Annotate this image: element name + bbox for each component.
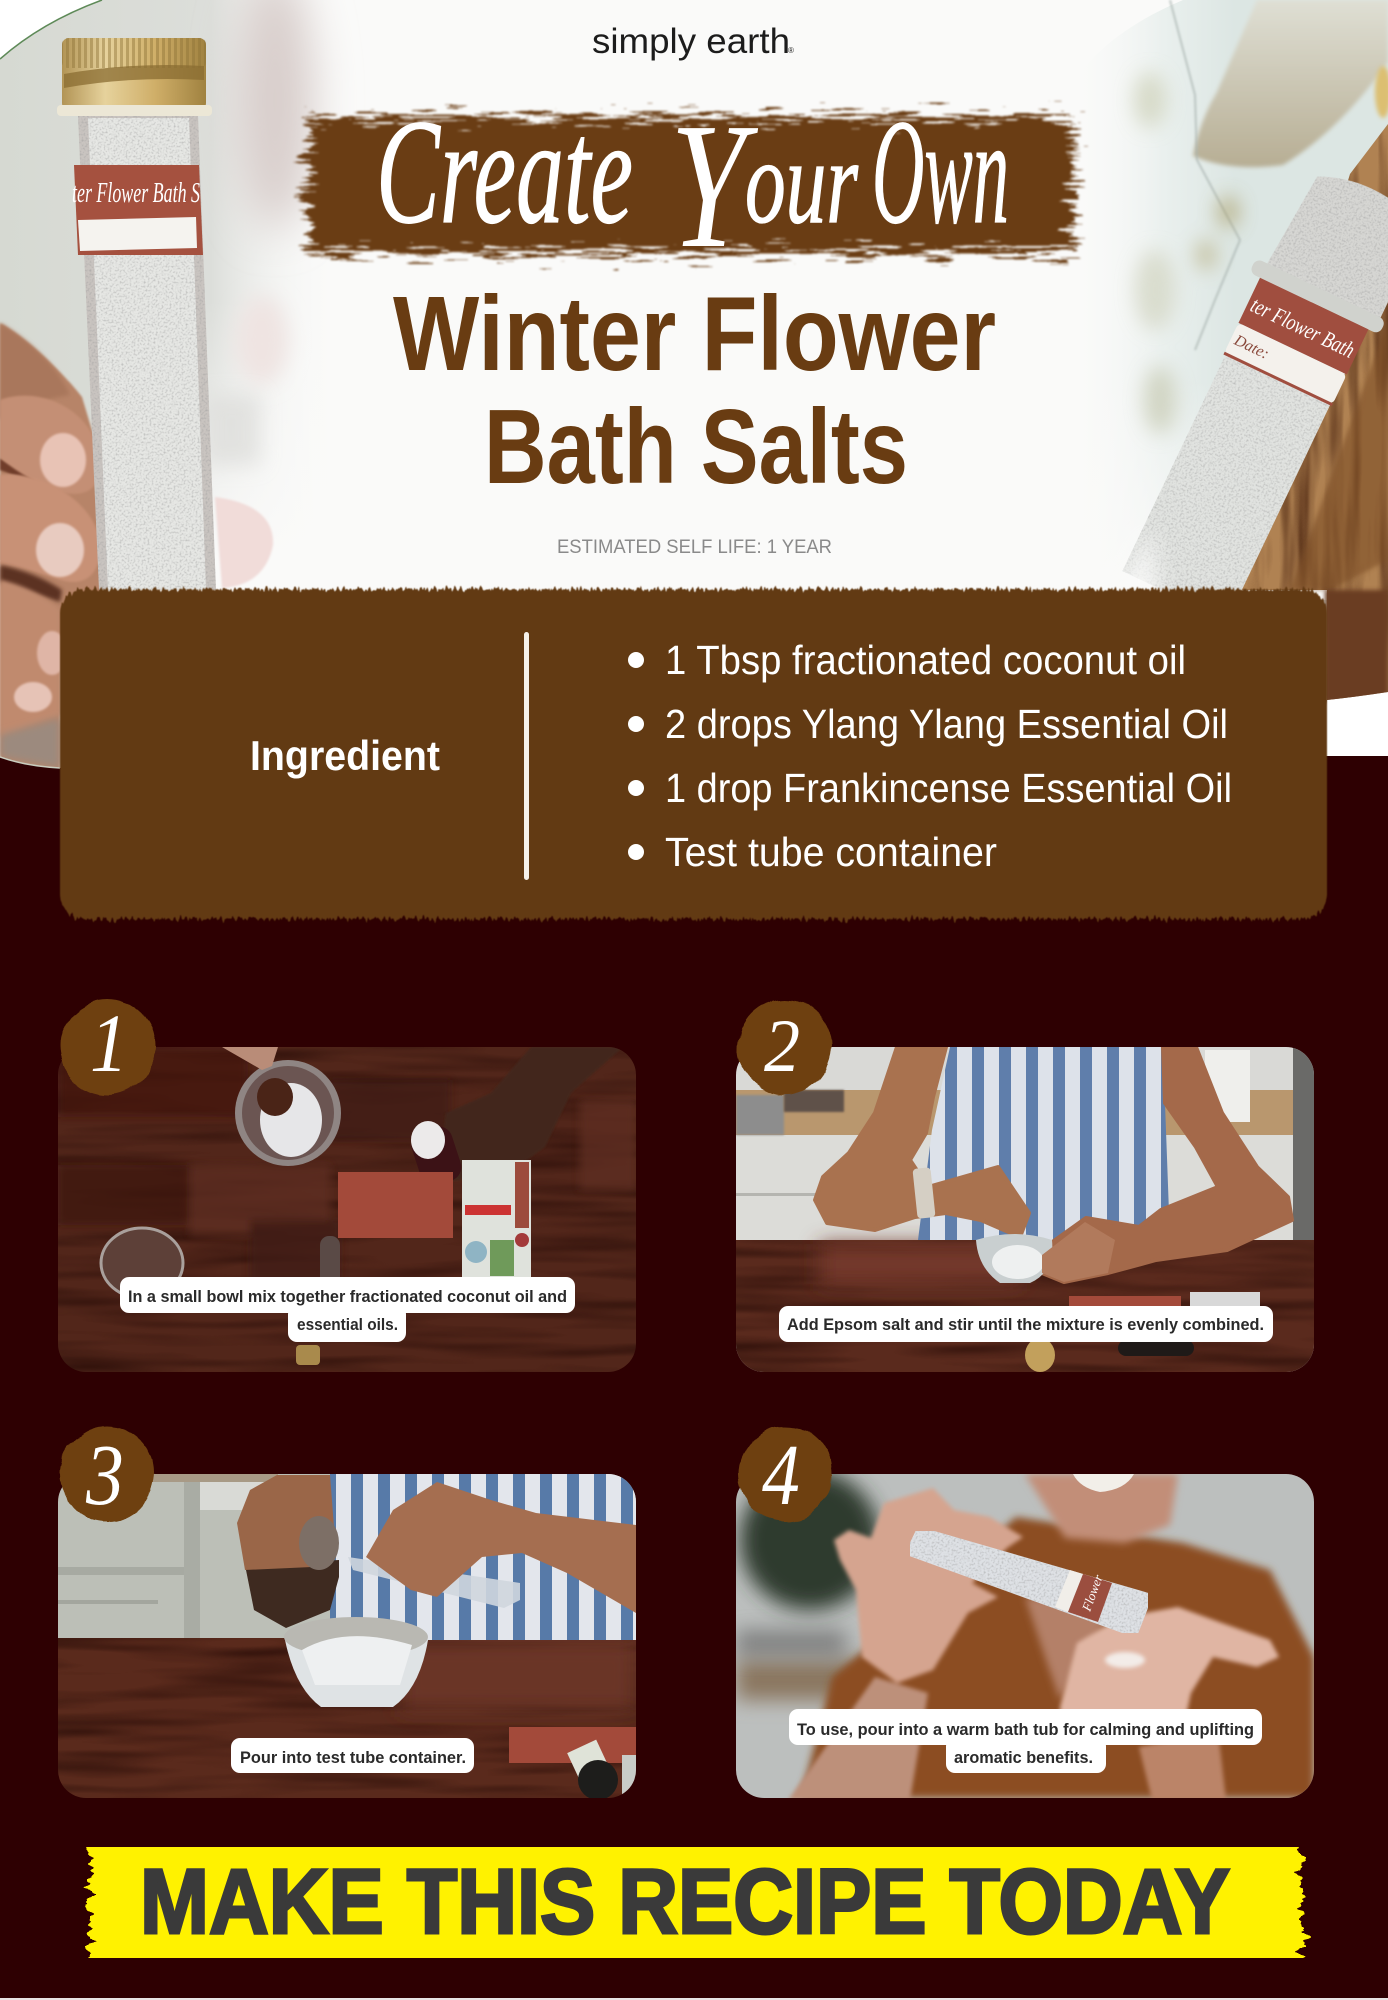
orange shirt (801, 1517, 1314, 1798)
step 1 caption: In a small bowl mix together fractionated coconut oil and (128, 1287, 567, 1306)
hero photo: left salt tube (57, 38, 216, 590)
right tube label: Date: (1230, 331, 1272, 363)
salt tube pouring (910, 1531, 1148, 1633)
step 3 badge (60, 1426, 154, 1523)
tube gold cap (57, 38, 212, 116)
chest (1022, 1598, 1106, 1700)
salt bowl (284, 1617, 428, 1707)
recipe card and bottles (509, 1727, 636, 1800)
step 4 caption: aromatic benefits. (954, 1748, 1093, 1767)
ingredient list: 2 drops Ylang Ylang Essential Oil (665, 701, 1228, 747)
step 3 badge: 3 (85, 1427, 124, 1523)
hero photo: left background blur (0, 0, 334, 490)
table (58, 1638, 636, 1798)
step 4 photo (736, 1470, 1314, 1800)
step 2 caption: Add Epsom salt and stir until the mixture is evenly combined. (787, 1315, 1264, 1334)
arms (815, 1047, 1292, 1282)
step 3 caption: Pour into test tube container. (240, 1748, 466, 1767)
tube label (72, 165, 203, 255)
logo: simply earth: ® (788, 46, 794, 55)
ingredient list: Test tube container (665, 829, 997, 875)
step 2 badge: 2 (764, 1003, 800, 1087)
fingernails (14, 433, 86, 712)
test tube (348, 1557, 520, 1608)
hero photo: wooden board (1225, 66, 1388, 702)
step 2 photo (736, 1047, 1314, 1372)
title banner: Create Your Own (306, 86, 1074, 285)
ingredient list: 1 Tbsp fractionated coconut oil (665, 637, 1186, 683)
table props (1025, 1292, 1260, 1372)
salt tube pouring: Flower (1078, 1572, 1106, 1614)
hero panel (0, 0, 1388, 770)
step 4 caption (789, 1709, 1262, 1773)
right hand and arm (366, 1482, 636, 1613)
step 3 caption (231, 1738, 474, 1773)
right forearm and hand (1060, 1607, 1279, 1800)
hero photo: right background (1122, 0, 1388, 604)
table (736, 1240, 1314, 1372)
step 2 caption (779, 1306, 1273, 1342)
title banner: Create Your Own: our (745, 115, 859, 248)
step 1 caption: essential oils. (297, 1315, 398, 1334)
glass lid and tube (101, 1228, 340, 1365)
shelf life note: ESTIMATED SELF LIFE: 1 YEAR (557, 537, 832, 558)
striped shirt (330, 1474, 636, 1640)
step 2 badge (738, 999, 832, 1095)
recipe card and sticker sheet (338, 1160, 531, 1280)
panel: ingredients (60, 589, 1327, 919)
watch (912, 1167, 936, 1219)
step 1 photo (58, 1047, 636, 1372)
left hand with spoon (237, 1475, 339, 1628)
ingredient list: 1 drop Frankincense Essential Oil (665, 765, 1232, 811)
hero photo: right salt tube (1122, 176, 1388, 592)
heading: Winter Flower Bath Salts (393, 275, 996, 506)
tube label: ter Flower Bath S (72, 178, 200, 209)
call to action banner: MAKE THIS RECIPE TODAY (140, 1851, 1230, 1953)
step 4 badge (738, 1426, 832, 1523)
logo: simply earth: simply earth (592, 22, 790, 61)
title banner: Create Your Own: Own (872, 89, 1009, 255)
ingredient heading: Ingredient (250, 732, 440, 779)
step 3 photo (58, 1474, 636, 1800)
beige blurred shade (1193, 0, 1388, 167)
divider (524, 632, 529, 880)
step 1 caption (120, 1277, 575, 1342)
heading: Winter Flower Bath Salts: Winter Flower (393, 275, 996, 393)
right tube label (1223, 278, 1368, 406)
dried flowers blur (1134, 72, 1238, 434)
heading: Winter Flower Bath Salts: Bath Salts (484, 388, 908, 506)
bowl (976, 1234, 1052, 1283)
step 4 caption: To use, pour into a warm bath tub for calming and uplifting (797, 1720, 1254, 1739)
face (1025, 1474, 1178, 1543)
ingredient list (628, 637, 1232, 875)
title banner: Create Your Own: Create (376, 89, 633, 255)
striped shirt (918, 1047, 1170, 1240)
right tube label: ter Flower Bath (1247, 292, 1359, 363)
step 4 badge: 4 (762, 1427, 800, 1523)
step 1 badge (60, 998, 154, 1095)
hand holding bottle (408, 1047, 623, 1189)
step 1 badge: 1 (90, 998, 128, 1090)
left arm and hand (788, 1488, 1023, 1800)
hero photo: hand holding the tube (0, 323, 273, 770)
title banner: Create Your Own: Y (670, 86, 759, 285)
mixing bowl with salt (222, 1047, 341, 1166)
